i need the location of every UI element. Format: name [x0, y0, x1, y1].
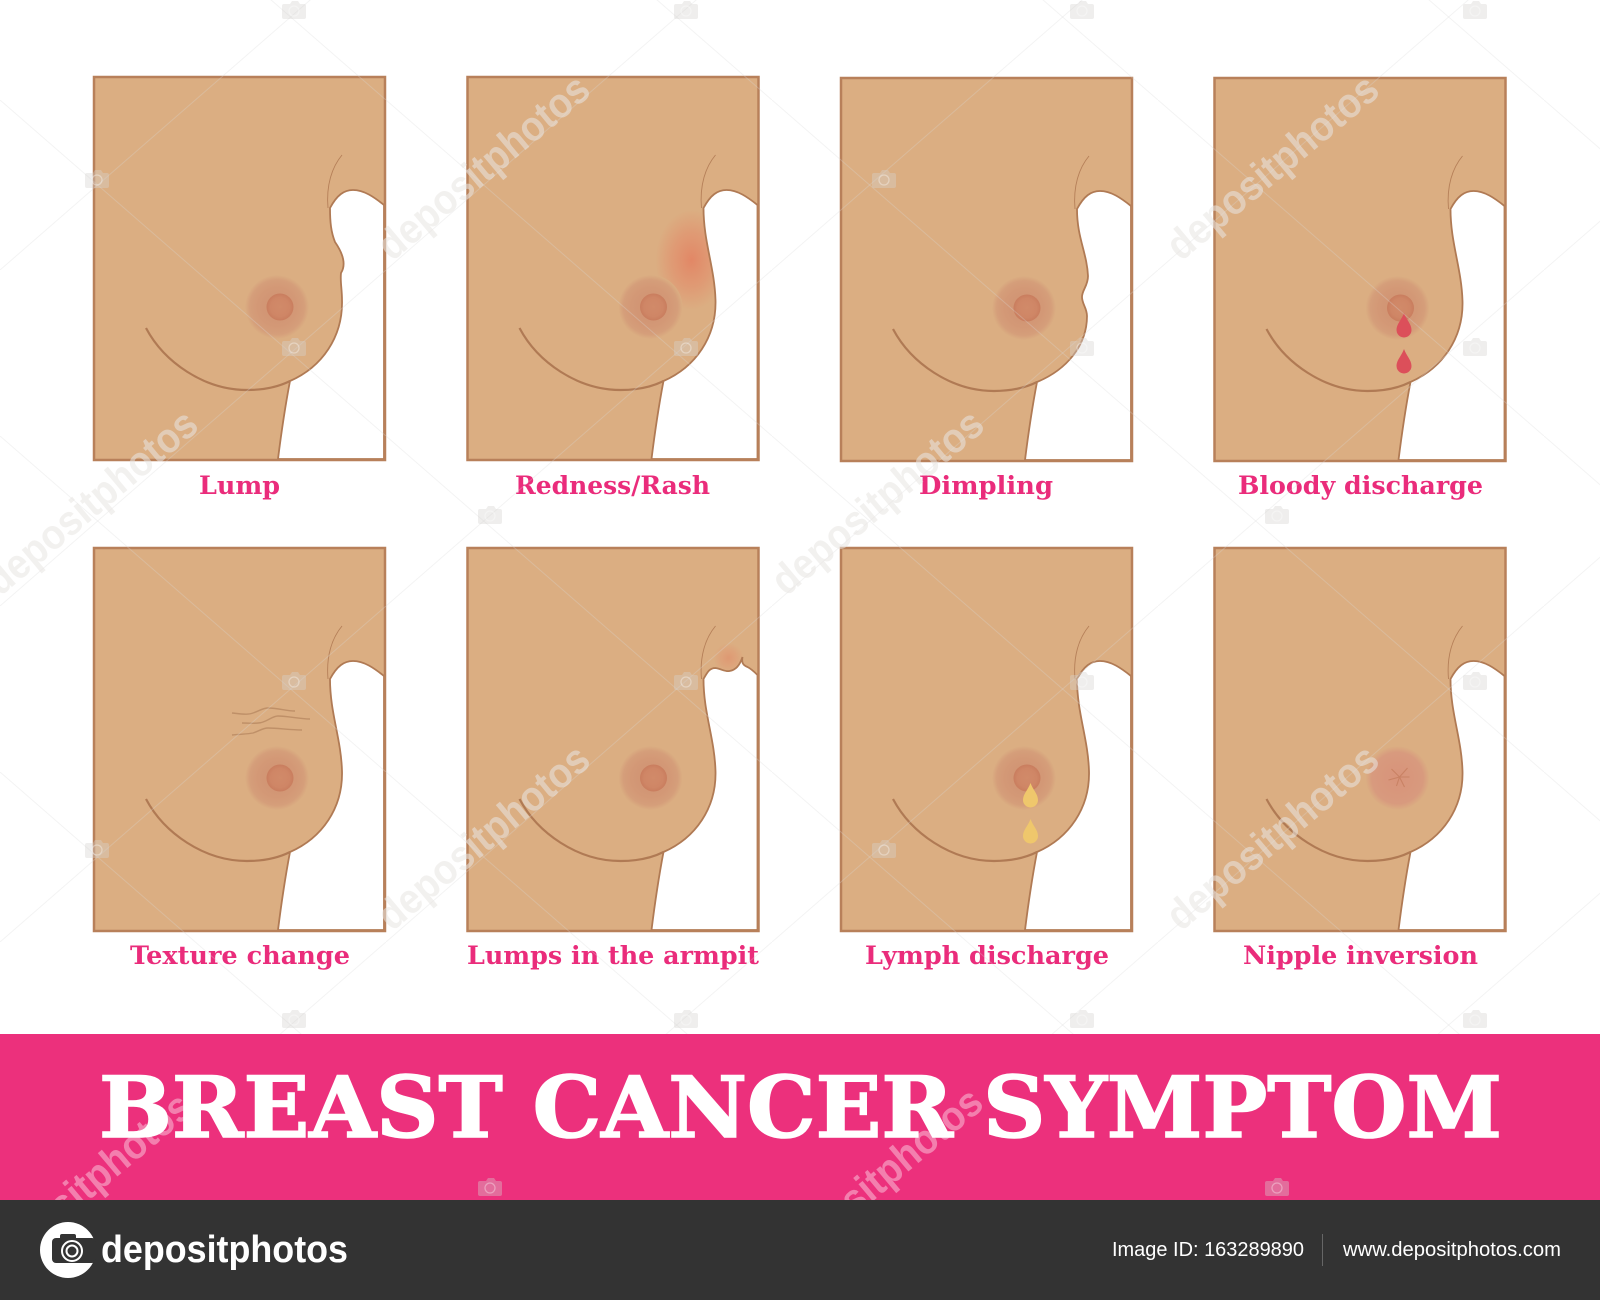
- panel: texture change: [94, 548, 385, 931]
- website url: www.depositphotos.com: [1342, 1239, 1561, 1261]
- icon: inverted nipple wrinkles: [1388, 768, 1410, 787]
- banner watermark: depositphotos: [761, 1077, 991, 1282]
- body outline: [1398, 661, 1504, 930]
- body outline: [1398, 191, 1504, 460]
- watermark overlay: depositphotos: [762, 399, 992, 604]
- label: nipple inversion: Nipple inversion: [1243, 941, 1478, 970]
- label: lumps in the armpit: Lumps in the armpit: [467, 941, 759, 970]
- panel: dimpling: [841, 78, 1132, 461]
- logo wordmark: depositphotos: [101, 1229, 348, 1271]
- body outline: [1025, 661, 1131, 930]
- watermark overlay: depositphotos: [368, 64, 598, 269]
- title: BREAST CANCER SYMPTOM: [99, 1058, 1502, 1157]
- panel: lump: [94, 77, 385, 460]
- label: bloody discharge: Bloody discharge: [1238, 471, 1483, 500]
- panel labels: [130, 471, 1483, 970]
- panel: lymph discharge: [841, 548, 1132, 931]
- label: dimpling: Dimpling: [919, 471, 1053, 500]
- panel: lumps in the armpit: [468, 548, 758, 931]
- body outline: [278, 661, 384, 930]
- banner watermark: [0, 1077, 991, 1287]
- label: texture change: Texture change: [130, 941, 350, 970]
- panel: redness and rash: [468, 77, 758, 460]
- panel: nipple inversion: [1214, 548, 1506, 931]
- label: lymph discharge: Lymph discharge: [865, 941, 1109, 970]
- icon: skin wrinkles: [232, 708, 310, 735]
- body outline with armpit lump: [652, 657, 758, 930]
- icon: blood drops: [1396, 313, 1412, 374]
- title banner: [0, 1034, 1600, 1200]
- panel: bloody discharge: [1214, 78, 1506, 461]
- icon: lymph drops: [1023, 783, 1038, 844]
- watermark overlay: depositphotos: [368, 734, 598, 939]
- image id: Image ID: 163289890: [1112, 1239, 1304, 1261]
- watermark overlay: depositphotos: [1157, 64, 1387, 269]
- body outline with dimple: [1025, 191, 1131, 460]
- icon: logo: [40, 1222, 96, 1278]
- body outline: [652, 190, 758, 459]
- body outline with lump: [278, 190, 384, 459]
- label: lump: Lump: [199, 471, 280, 500]
- label: redness and rash: Redness/Rash: [515, 471, 710, 500]
- watermark overlay: depositphotos: [1157, 734, 1387, 939]
- footer bar: [0, 1200, 1600, 1300]
